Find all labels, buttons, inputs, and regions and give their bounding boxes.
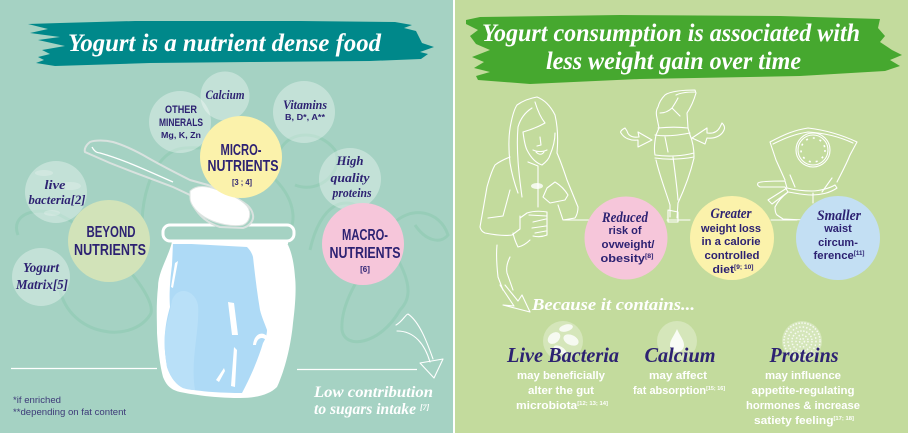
circle: reduced risk of overweight: risk of bbox=[608, 225, 642, 237]
circle: greater weight loss: Greater bbox=[710, 206, 752, 222]
column: live bacteria: may beneficially bbox=[517, 370, 606, 382]
bubble: beyond nutrients: NUTRIENTS bbox=[74, 242, 146, 259]
circle: smaller waist: Smaller bbox=[817, 208, 861, 224]
bubble: other minerals: MINERALS bbox=[159, 117, 203, 129]
bubble: yogurt matrix: Matrix[5] bbox=[15, 278, 68, 293]
circle: reduced risk of overweight: [8] bbox=[645, 254, 654, 260]
illustration: spoon bbox=[85, 140, 253, 228]
bubble: micro-nutrients: [3 ; 4] bbox=[232, 178, 252, 187]
column: proteins: hormones & increase bbox=[746, 400, 860, 412]
illustration: scale and measuring tape bbox=[758, 128, 857, 220]
bubble: vitamins: B, D*, A** bbox=[285, 112, 326, 122]
bubble: macro-nutrients: [6] bbox=[360, 265, 370, 274]
bubble: micro-nutrients: NUTRIENTS bbox=[208, 158, 279, 175]
footnotes: *if enriched bbox=[13, 395, 61, 406]
bubble: beyond nutrients bbox=[68, 200, 150, 282]
column: proteins: [17; 18] bbox=[833, 416, 854, 422]
circle: greater weight loss bbox=[690, 196, 774, 280]
benefit circles bbox=[584, 196, 880, 280]
bubble: other minerals: OTHER bbox=[165, 104, 197, 116]
bubble: calcium bbox=[200, 72, 250, 120]
column: live bacteria: Live Bacteria bbox=[506, 343, 619, 367]
circle: smaller waist: waist bbox=[823, 223, 852, 235]
arrow: because it contains bbox=[500, 285, 530, 312]
bubble: vitamins: Vitamins bbox=[283, 97, 327, 112]
column: proteins: satiety feeling bbox=[754, 415, 829, 427]
title banner: weight gain: Yogurt consumption is associated with bbox=[482, 20, 860, 47]
circle: greater weight loss: [9; 10] bbox=[734, 265, 754, 271]
bubble: yogurt matrix bbox=[12, 248, 70, 306]
circle: smaller waist: [11] bbox=[854, 251, 864, 257]
column: live bacteria bbox=[506, 321, 619, 412]
bubble: macro-nutrients bbox=[322, 203, 404, 285]
title banner: nutrient dense food bbox=[28, 21, 434, 66]
title banner: weight gain: less weight gain over time bbox=[546, 48, 801, 75]
bubble: micro-nutrients bbox=[200, 116, 282, 198]
column: calcium: Calcium bbox=[644, 343, 716, 367]
panel: nutrient dense food bbox=[0, 0, 453, 433]
column: live bacteria: alter the gut bbox=[528, 385, 594, 397]
circle: greater weight loss: in a calorie bbox=[702, 236, 760, 248]
bubble: calcium: Calcium bbox=[206, 88, 245, 102]
panel: weight gain bbox=[455, 0, 908, 433]
circle: smaller waist: circum- bbox=[818, 237, 858, 249]
nutrient bubbles bbox=[12, 72, 404, 306]
circle: greater weight loss: controlled bbox=[704, 250, 760, 262]
circle: reduced risk of overweight: obesity bbox=[600, 253, 639, 265]
footnotes: **depending on fat content bbox=[13, 407, 126, 418]
illustration: figure with arrows bbox=[621, 90, 725, 222]
divider lines bbox=[11, 368, 417, 370]
column: calcium: fat absorption bbox=[633, 385, 708, 397]
subheading: because it contains: Because it contains... bbox=[531, 295, 695, 314]
text: low contribution to sugars intake bbox=[313, 384, 433, 418]
bubble: other minerals bbox=[149, 91, 211, 153]
bubble: yogurt matrix: Yogurt bbox=[23, 261, 60, 276]
bubble: high quality proteins: quality bbox=[330, 170, 370, 185]
circle: reduced risk of overweight bbox=[584, 196, 668, 280]
column: proteins: may influence bbox=[765, 370, 841, 382]
bubble: high quality proteins: proteins bbox=[332, 185, 372, 200]
text: low contribution to sugars intake: [7] bbox=[420, 403, 430, 412]
circle: smaller waist bbox=[796, 196, 880, 280]
text: low contribution to sugars intake: to sugars intake bbox=[314, 401, 416, 418]
bubble: live bacteria: live bbox=[44, 177, 66, 192]
footnotes bbox=[13, 395, 126, 418]
circle: greater weight loss: diet bbox=[712, 264, 732, 276]
bubble: micro-nutrients: MICRO- bbox=[220, 142, 262, 159]
column: calcium: may affect bbox=[649, 370, 707, 382]
bubble: macro-nutrients: MACRO- bbox=[342, 227, 388, 244]
column: live bacteria: [12; 13; 14] bbox=[577, 401, 608, 407]
bubble: high quality proteins: High bbox=[336, 153, 364, 168]
title banner: weight gain bbox=[466, 15, 902, 84]
bubble: high quality proteins bbox=[319, 148, 381, 210]
bubble: live bacteria bbox=[25, 161, 87, 223]
bubble: live bacteria: bacteria[2] bbox=[28, 192, 86, 207]
bubble: beyond nutrients: BEYOND bbox=[86, 224, 136, 241]
circle: reduced risk of overweight: Reduced bbox=[601, 210, 648, 226]
circle: greater weight loss: weight loss bbox=[700, 223, 761, 235]
column: proteins: appetite-regulating bbox=[752, 385, 855, 397]
column: proteins bbox=[746, 321, 860, 427]
bubble: vitamins bbox=[273, 81, 335, 143]
illustration: yogurt jar bbox=[157, 225, 296, 398]
column: live bacteria: microbiota bbox=[516, 400, 573, 412]
column: proteins: Proteins bbox=[769, 343, 838, 367]
column: calcium: [15; 16] bbox=[706, 386, 725, 392]
circle: reduced risk of overweight: ovweight/ bbox=[602, 239, 654, 251]
illustration: woman eating yogurt bbox=[480, 97, 797, 290]
bubble: other minerals: Mg, K, Zn bbox=[161, 130, 201, 140]
text: low contribution to sugars intake: Low contribution bbox=[313, 384, 433, 401]
bubble: macro-nutrients: NUTRIENTS bbox=[330, 245, 401, 262]
column: calcium bbox=[633, 321, 725, 397]
title banner: nutrient dense food: Yogurt is a nutrient dense food bbox=[68, 30, 381, 57]
circle: smaller waist: ference bbox=[814, 250, 853, 262]
arrow: down to sugars bbox=[396, 314, 443, 378]
